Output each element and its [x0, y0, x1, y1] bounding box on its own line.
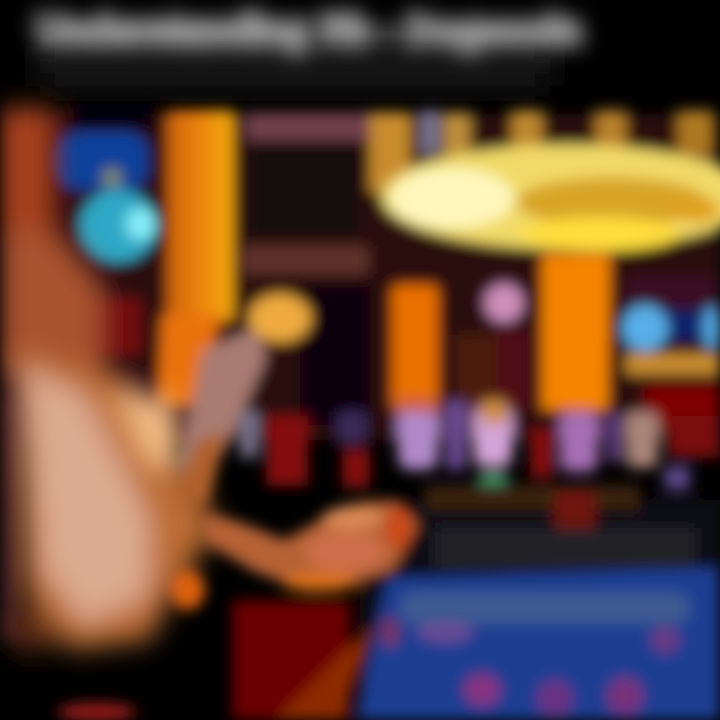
- icon: blue sphere: [58, 104, 156, 262]
- casino carpet: [356, 528, 720, 720]
- right cabinet: [455, 275, 720, 427]
- dark red panel: [92, 298, 142, 354]
- title: Understanding Rb - Dogecoin: [36, 6, 582, 53]
- orange column left: [158, 110, 233, 405]
- orange wrist spot: [171, 570, 205, 610]
- red sleeve: [57, 600, 372, 720]
- left hand and skin: [0, 108, 215, 652]
- icon: pink light: [485, 284, 523, 322]
- glowing table: [382, 145, 720, 251]
- icon: blue lights: [622, 305, 720, 351]
- table crown: [370, 110, 712, 192]
- raised finger: [175, 294, 311, 505]
- forearm and hand: [205, 500, 418, 592]
- orange columns right: [392, 254, 610, 411]
- table ledge: [425, 485, 640, 530]
- carpet pink dots: [381, 617, 679, 716]
- title band: [36, 6, 582, 86]
- slot machines row: [240, 398, 720, 490]
- upper middle wall: [242, 112, 372, 425]
